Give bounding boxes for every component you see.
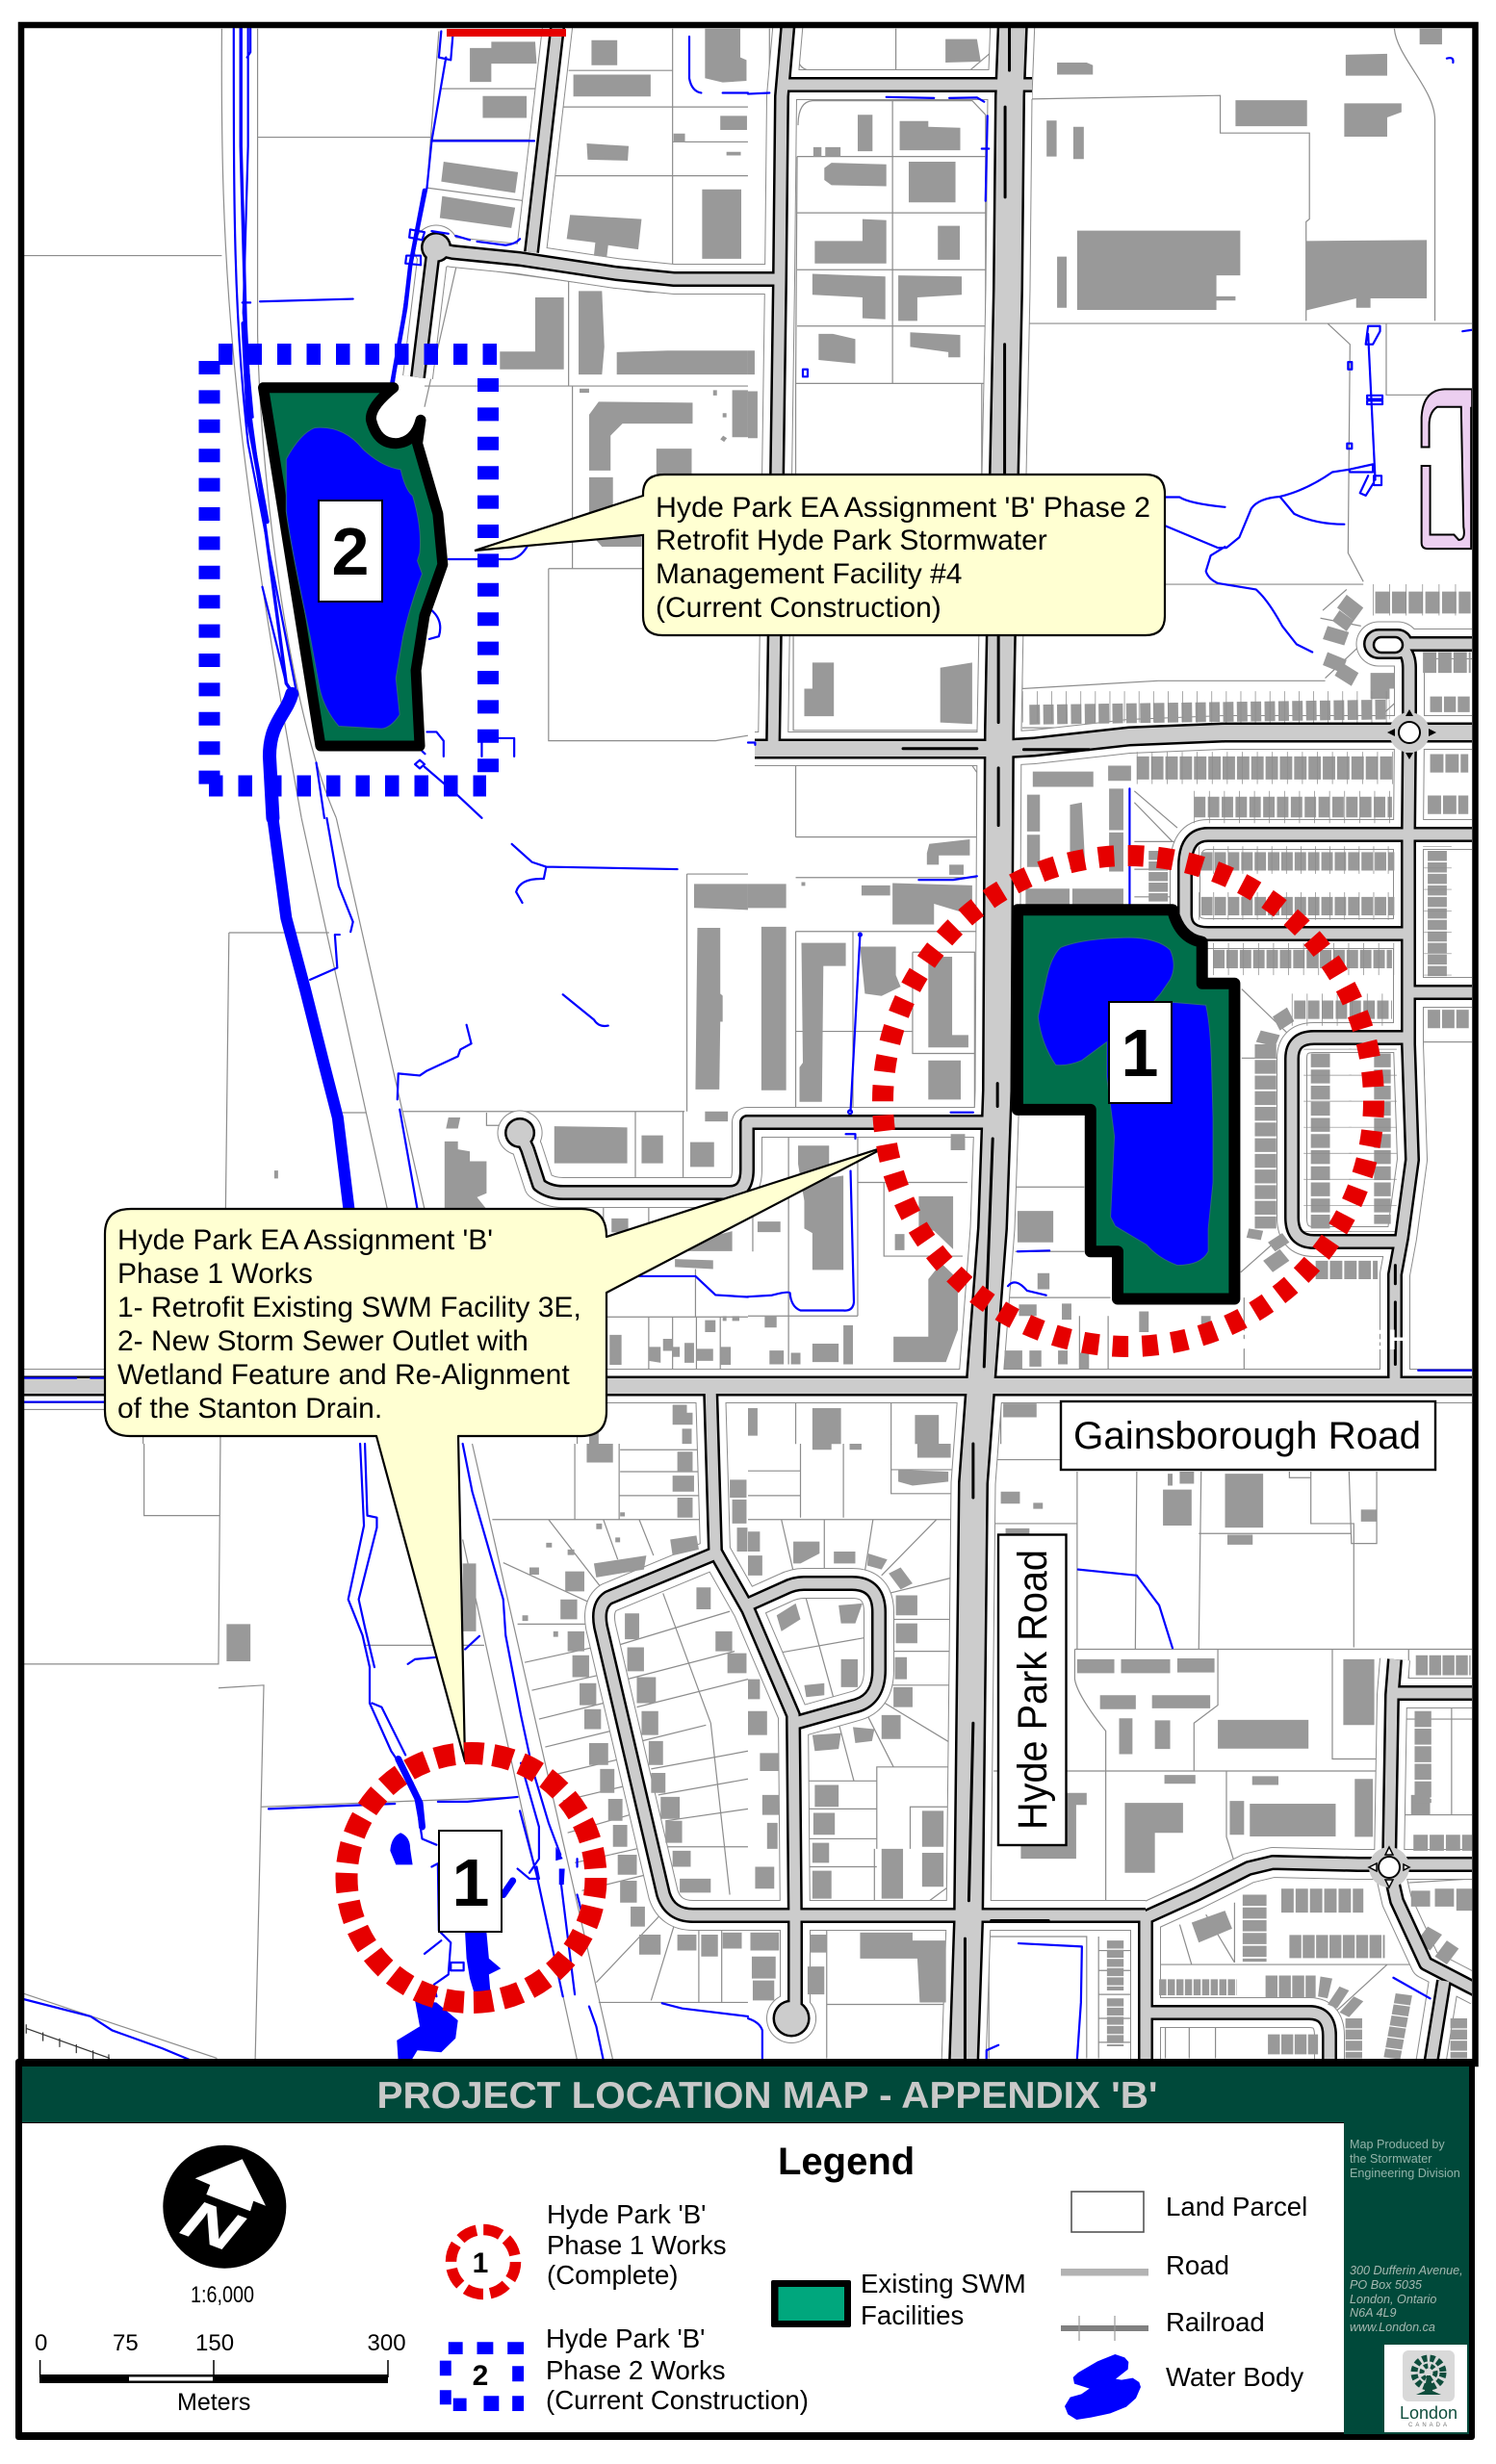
road medians and islands xyxy=(903,29,1436,2058)
legend item: existing SWM facilities xyxy=(771,2269,1026,2330)
title bar: PROJECT LOCATION MAP - APPENDIX 'B' xyxy=(377,2075,1157,2117)
facility 2 pond xyxy=(286,427,423,729)
road label: Hyde Park Road: Hyde Park Road xyxy=(1011,1550,1056,1830)
facility 2: Hyde Park SWM Facility 4 xyxy=(264,388,443,746)
railway line bottom left xyxy=(26,2024,110,2061)
legend item: phase 2 works: Hyde Park 'B' xyxy=(546,2323,705,2353)
scale bar: 75 xyxy=(113,2330,139,2356)
facility 2 outline xyxy=(264,388,443,746)
legend panel xyxy=(15,2059,1475,2440)
callout: Phase 2 xyxy=(475,475,1165,635)
legend item: phase 2 works xyxy=(440,2323,809,2415)
north arrow xyxy=(163,2145,286,2269)
legend item: railroad: Railroad xyxy=(1166,2307,1265,2337)
callout: Phase 2: Hyde Park EA Assignment 'B' Phase 2 xyxy=(656,492,1150,524)
credits column: London, Ontario xyxy=(1350,2293,1436,2306)
dashed red ring: Phase 1 works at outlet xyxy=(347,1754,596,2002)
facility 1: Retrofit SWM Facility 3E xyxy=(1018,910,1234,1299)
scale bar: 150 xyxy=(195,2330,234,2356)
logo: London Canada: CANADA xyxy=(1408,2423,1450,2428)
road label: Gainsborough Road: Gainsborough Road xyxy=(1073,1415,1421,1457)
red marker line at top xyxy=(447,29,566,37)
credits column: PO Box 5035 xyxy=(1350,2278,1423,2292)
legend item: phase 2 works: (Current Construction) xyxy=(546,2385,809,2415)
callout: Phase 2: (Current Construction) xyxy=(656,592,941,624)
legend item: railroad xyxy=(1061,2307,1265,2341)
callout: Phase 1: of the Stanton Drain. xyxy=(117,1393,382,1424)
parcel boundary lines xyxy=(24,29,1473,2061)
facility 1 outline xyxy=(1018,910,1234,1299)
callout: Phase 1: Hyde Park EA Assignment 'B' xyxy=(117,1224,493,1256)
pink parking lot shape xyxy=(1422,389,1472,549)
road label: Hyde Park Road xyxy=(998,1534,1067,1845)
streams and drains xyxy=(24,29,1473,2063)
legend item: land parcel xyxy=(1071,2192,1307,2232)
legend item: phase 1 works: (Complete) xyxy=(547,2260,678,2290)
facility 1 pond xyxy=(1038,937,1213,1266)
dashed blue boundary: Phase 2 works xyxy=(209,354,499,785)
legend heading: Legend xyxy=(778,2141,915,2183)
callout: Phase 1: 1- Retrofit Existing SWM Facility 3E, xyxy=(117,1292,581,1323)
scale bar xyxy=(35,2330,406,2416)
legend item: road: Road xyxy=(1166,2250,1229,2280)
faint road name under marker: GAINSBOROUGH xyxy=(1150,1324,1410,1356)
logo: London Canada xyxy=(1384,2345,1467,2432)
number label 1 at facility: 1 xyxy=(1122,1015,1158,1091)
title bar xyxy=(22,2066,1469,2122)
road label: Gainsborough Road xyxy=(1061,1401,1435,1470)
legend item: phase 1 works: 1 xyxy=(473,2247,488,2279)
callout: Phase 2: Management Facility #4 xyxy=(656,558,963,590)
number label 2 xyxy=(319,500,382,602)
callout: Phase 1: Wetland Feature and Re-Alignment xyxy=(117,1359,570,1391)
credits column: the Stormwater xyxy=(1350,2152,1432,2166)
callout: Phase 1: 2- New Storm Sewer Outlet with xyxy=(117,1325,529,1357)
legend item: existing SWM facilities: Facilities xyxy=(861,2300,964,2330)
credits column xyxy=(1344,2122,1469,2434)
dashed red ring: Phase 1 works at facility xyxy=(883,856,1374,1347)
logo: London Canada: London xyxy=(1400,2403,1457,2423)
legend item: water body xyxy=(1065,2354,1303,2420)
callout: Phase 1: Phase 1 Works xyxy=(117,1258,313,1290)
north arrow: N xyxy=(166,2191,260,2261)
number label 1 at facility xyxy=(1109,1002,1172,1103)
credits column: Engineering Division xyxy=(1350,2167,1460,2180)
legend item: existing SWM facilities: Existing SWM xyxy=(861,2269,1026,2298)
number label 1 at outlet xyxy=(439,1831,502,1932)
legend item: phase 1 works xyxy=(451,2199,727,2295)
scale bar: Meters xyxy=(177,2389,250,2416)
credits column: www.London.ca xyxy=(1350,2321,1435,2334)
legend item: phase 2 works: Phase 2 Works xyxy=(546,2355,726,2385)
credits column: N6A 4L9 xyxy=(1350,2306,1397,2320)
callout: Phase 1 xyxy=(105,1146,887,1761)
number label 1 at outlet: 1 xyxy=(452,1845,489,1920)
legend item: water body: Water Body xyxy=(1166,2362,1303,2392)
scale bar: 300 xyxy=(368,2330,406,2356)
callout: Phase 2: Retrofit Hyde Park Stormwater xyxy=(656,525,1047,556)
credits column: Map Produced by xyxy=(1350,2138,1445,2151)
number label 2: 2 xyxy=(332,514,369,589)
legend item: phase 1 works: Phase 1 Works xyxy=(547,2230,727,2260)
credits column: 300 Dufferin Avenue, xyxy=(1350,2264,1463,2277)
legend item: phase 1 works: Hyde Park 'B' xyxy=(547,2199,706,2229)
legend item: road xyxy=(1061,2250,1229,2280)
map scale ratio: 1:6,000 xyxy=(191,2282,254,2308)
legend item: phase 2 works: 2 xyxy=(473,2360,488,2392)
legend item: land parcel: Land Parcel xyxy=(1166,2192,1307,2221)
building footprints xyxy=(226,29,1473,2058)
scale bar: 0 xyxy=(35,2330,47,2356)
